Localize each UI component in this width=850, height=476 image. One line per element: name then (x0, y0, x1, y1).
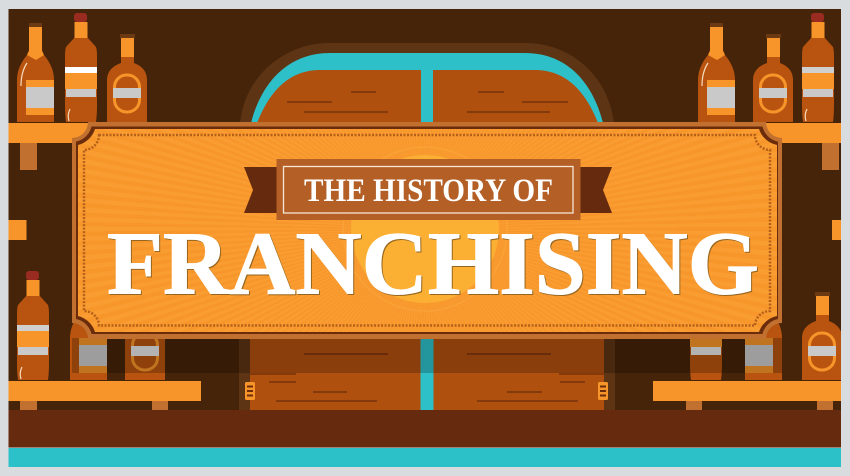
bottle: lower left round (125, 339, 165, 380)
ribbon tail left (244, 167, 277, 213)
shelf stub: middle left (8, 220, 26, 240)
sign banner (72, 122, 782, 339)
door hinge right (598, 382, 608, 400)
lower doors (239, 338, 615, 410)
bottle: lower right round (802, 292, 842, 380)
teal floor strip (8, 448, 841, 467)
ribbon heading (244, 159, 612, 220)
shelf stub: middle right (832, 220, 841, 240)
shelf: lower right (653, 381, 841, 410)
sun disc (343, 147, 507, 311)
ribbon plate (276, 159, 580, 220)
shelf: top left (8, 123, 94, 170)
title: franchising: FRANCHISING (107, 214, 759, 314)
door hinge left (245, 382, 255, 400)
shelf: lower left (8, 381, 201, 410)
upper door arch (240, 43, 614, 123)
bottle: lower right tall (745, 323, 782, 380)
bottle: top left round (107, 34, 147, 122)
bottle: top left red cap (65, 13, 97, 122)
banner drop shadow band (72, 338, 782, 373)
bottle: top right round (753, 34, 793, 122)
bottle: lower left tall (70, 323, 107, 380)
counter (8, 410, 841, 448)
bottle: top right tall (698, 23, 735, 122)
bottle: top left tall (17, 23, 54, 122)
bottle: lower right red cap (690, 339, 722, 380)
heading: the history of: THE HISTORY OF (304, 173, 553, 209)
bottle: top right red cap (802, 13, 834, 122)
ribbon tail right (579, 167, 612, 213)
dotted border (84, 135, 770, 326)
sunburst rays (78, 129, 777, 332)
shelf: top right (760, 123, 841, 170)
bottle: lower left red cap (17, 271, 49, 380)
